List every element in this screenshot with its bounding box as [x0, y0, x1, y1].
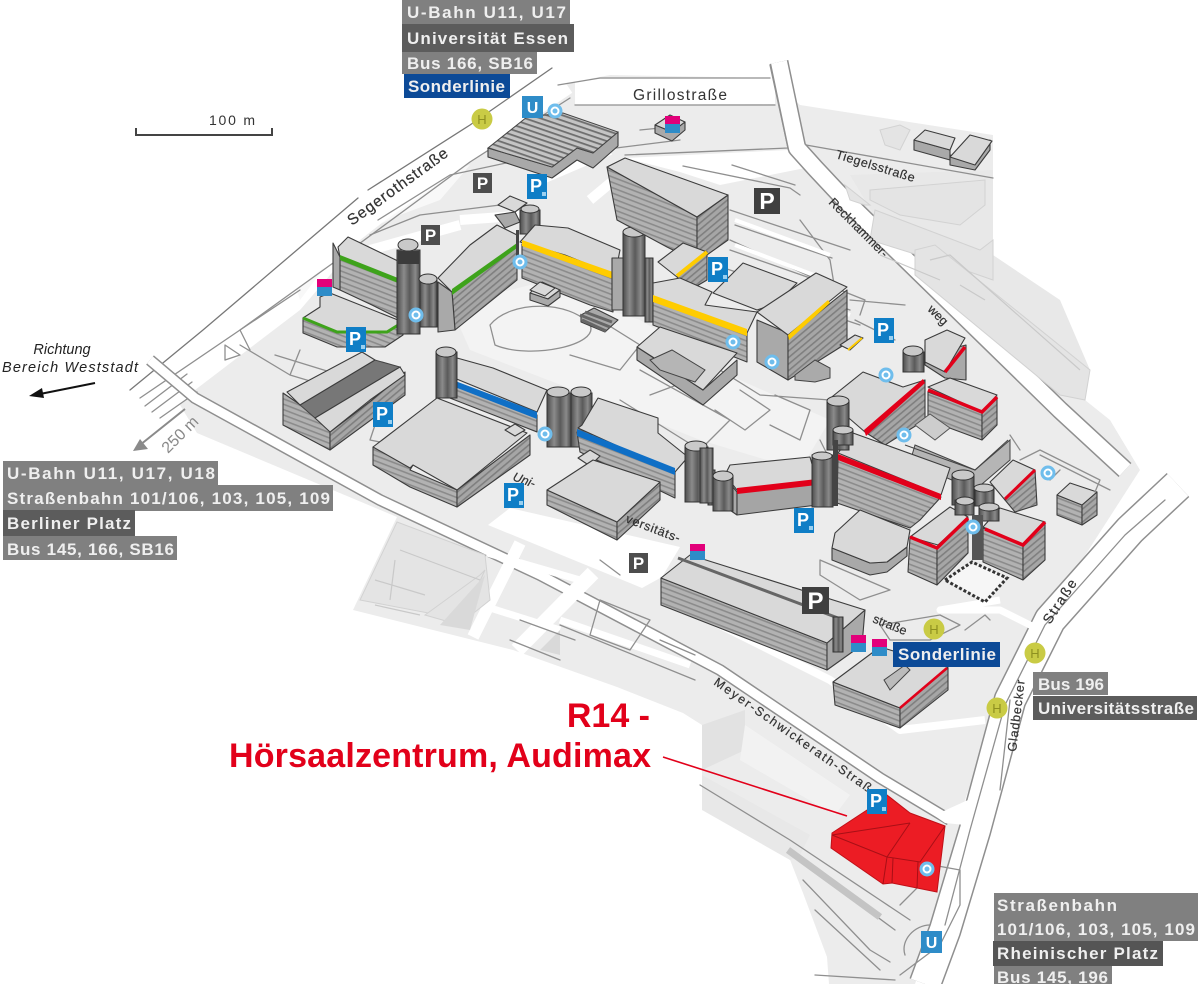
- building: R14 Hörsaalzentrum, Audimax: [831, 795, 945, 892]
- street names: Reckhammer-: [826, 195, 891, 260]
- small square pavilions: [530, 282, 612, 331]
- building: red wing left: [700, 448, 817, 515]
- accessible parking signs: P: [530, 176, 542, 196]
- north towers: [495, 196, 540, 268]
- transit label: Berliner Platz: Bus 145, 166, SB16: [7, 540, 174, 559]
- parking rows north-east: [600, 128, 905, 340]
- street names: Straße: [1039, 576, 1080, 627]
- bus stop markers: H: [477, 112, 487, 127]
- leader line: [663, 757, 847, 816]
- building: parking deck: [661, 555, 865, 670]
- transit label: Universitätsstraße: Universitätsstraße: [1038, 699, 1194, 718]
- campus ground: [180, 75, 1140, 984]
- heading: R14 Hörsaalzentrum, Audimax: [229, 697, 651, 775]
- parking signs dark: P: [425, 226, 436, 245]
- transit label: Berliner Platz: Straßenbahn 101/106, 103, 105, 109: [7, 489, 330, 508]
- distance arrow 250 m: [133, 409, 202, 457]
- building: striped parking hall: [488, 113, 618, 178]
- transit label: Universitätsstraße: Bus 196: [1038, 675, 1104, 694]
- building: yellow wing east: [653, 263, 863, 382]
- heading: R14 Hörsaalzentrum, Audimax: Hörsaalzentrum, Audimax: [229, 737, 651, 775]
- plaza paths: [225, 290, 1110, 640]
- transit label: Berliner Platz: Berliner Platz: [7, 514, 131, 533]
- street names: Meyer-Schwickerath-Straße: [711, 675, 882, 800]
- direction note: Weststadt: Bereich Weststadt: [2, 360, 139, 376]
- transit label: Universität Essen: [402, 0, 574, 98]
- accessible parking signs: P: [877, 320, 889, 340]
- street names: straße: [871, 612, 909, 638]
- accessible parking signs: P: [711, 259, 723, 279]
- transit label: Universitätsstraße: [1033, 672, 1197, 720]
- building: low court building: [637, 327, 737, 405]
- green towers: [397, 239, 437, 334]
- faded surrounding buildings south: [700, 700, 1010, 980]
- accessible parking signs: P: [349, 329, 361, 349]
- street names: versitäts-: [624, 512, 682, 545]
- green roof wing east: [438, 225, 517, 332]
- accessible parking signs: P: [870, 791, 882, 811]
- building: yellow wing west: [520, 225, 624, 332]
- U-Bahn signs: [522, 96, 942, 953]
- building: small house north: [655, 115, 685, 141]
- street names: Uni-: [511, 470, 537, 491]
- transit label: Rheinischer Platz: Rheinischer Platz: [997, 944, 1158, 963]
- bus stop markers: H: [929, 622, 939, 637]
- accessible parking signs: P: [507, 485, 519, 505]
- building: green wing: [303, 196, 540, 347]
- distance arrow 250 m: 250 m: [159, 413, 202, 457]
- green low building: [303, 293, 403, 347]
- bus stop markers: H: [1030, 646, 1040, 661]
- green roof wing west: [333, 237, 400, 318]
- parking signs dark: P: [807, 588, 824, 615]
- wheelchair signs: [317, 116, 887, 656]
- transit label: Rheinischer Platz: 101/106, 103, 105, 109: [997, 920, 1195, 939]
- building: NE houses: [914, 130, 992, 170]
- building: hall centre: [547, 460, 660, 540]
- parking signs dark: P: [477, 174, 488, 193]
- street names: Grillostraße: [633, 87, 727, 104]
- transit label: Sonderlinie east: Sonderlinie: [898, 645, 996, 664]
- street names: Gladbecker: [1005, 679, 1028, 752]
- scale bar: 100 m: [209, 112, 255, 128]
- transit label: Berliner Platz: [3, 461, 333, 560]
- parking signs dark: P: [633, 554, 644, 573]
- heading: R14 Hörsaalzentrum, Audimax: R14 -: [567, 697, 650, 735]
- building: red north blocks: [828, 330, 1010, 490]
- street names: [344, 87, 1080, 800]
- street names: Tiegelsstraße: [834, 147, 917, 185]
- faded surrounding buildings south-west: [360, 522, 695, 680]
- transit label: Universität Essen: Sonderlinie: [408, 77, 505, 96]
- building: red cross cluster: [908, 460, 1045, 585]
- building: big hall west: [373, 398, 530, 507]
- building: yellow wing north small: [658, 243, 707, 290]
- bus stop markers: [472, 108, 1046, 718]
- transit label: Rheinischer Platz: Straßenbahn: [997, 896, 1117, 915]
- building: west block: [283, 352, 405, 450]
- bus stop markers: H: [992, 701, 1002, 716]
- transit label: Universität Essen: Bus 166, SB16: [407, 54, 533, 73]
- U-Bahn signs: U: [926, 935, 937, 952]
- direction note: Weststadt: [2, 342, 139, 398]
- blue towers: [547, 387, 592, 447]
- transit label: Berliner Platz: U-Bahn U11, U17, U18: [7, 464, 215, 483]
- transit label: Universität Essen: U-Bahn U11, U17: [407, 3, 566, 22]
- building: red central wing: [812, 396, 950, 528]
- building: blue wing east: [577, 398, 715, 505]
- accessible parking signs: [346, 174, 894, 814]
- building: tall block: [607, 158, 728, 262]
- street names: weg: [924, 302, 951, 328]
- building: red south block: [833, 647, 948, 728]
- building: small east block: [1020, 450, 1100, 525]
- U-Bahn signs: U: [527, 100, 538, 117]
- scale bar: [136, 112, 272, 135]
- building: round hall: [832, 510, 910, 575]
- transit label: Universität Essen: Universität Essen: [407, 29, 568, 48]
- courtyard with colonnade: [945, 562, 1007, 602]
- direction note: Weststadt: Richtung: [33, 342, 91, 358]
- entrance markers: [408, 104, 1056, 876]
- faded surrounding buildings north-east: [845, 125, 1090, 400]
- building: blue wing west: [436, 347, 547, 432]
- yellow towers: [623, 227, 653, 322]
- street names: Segerothstraße: [344, 145, 451, 229]
- parking signs dark: [421, 173, 829, 615]
- transit label: Rheinischer Platz: [993, 893, 1198, 984]
- accessible parking signs: P: [376, 404, 388, 424]
- transit label: Sonderlinie east: [893, 642, 1000, 667]
- accessible parking signs: P: [797, 510, 809, 530]
- parking signs dark: P: [759, 188, 775, 214]
